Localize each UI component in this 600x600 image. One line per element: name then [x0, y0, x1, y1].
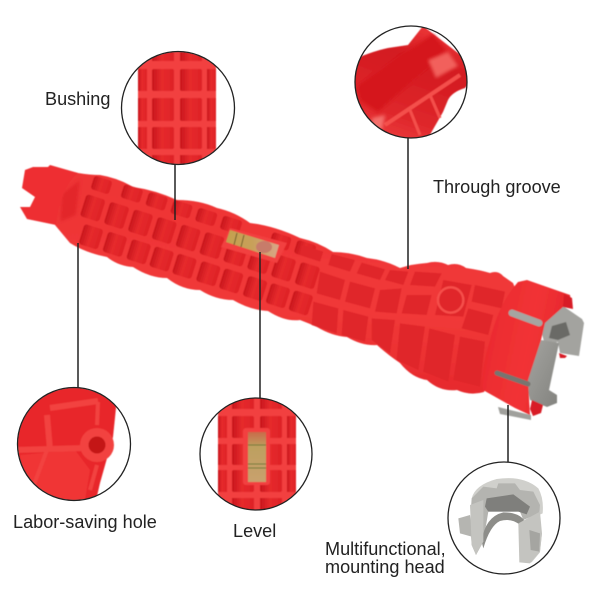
- callout: mounting head: [448, 462, 560, 574]
- label: multifunctional, mounting head: Multifunctional,: [325, 539, 446, 559]
- callout: level: [200, 395, 312, 513]
- mounting head red cap: [482, 280, 572, 415]
- callout: bushing: [122, 50, 234, 167]
- label: level: Level: [233, 521, 276, 541]
- mounting head gray insert: [498, 306, 584, 420]
- callout: labor-saving hole: [16, 386, 132, 502]
- leader lines: [78, 138, 508, 462]
- rib grid: narrow shaft cells: [72, 174, 329, 316]
- callout: through groove: [354, 25, 468, 139]
- left end cap: [20, 165, 78, 225]
- wrench tool: [20, 165, 584, 420]
- wrench body: [50, 166, 520, 394]
- head slots: [512, 313, 539, 323]
- shaft start recess: [60, 180, 80, 222]
- label: through groove: Through groove: [433, 177, 561, 197]
- rib grid: flared section cells: [300, 245, 505, 387]
- label: multifunctional, mounting head: mounting head: [325, 557, 445, 577]
- circle emboss: [438, 287, 463, 313]
- label: labor-saving hole: Labor-saving hole: [13, 512, 157, 532]
- level window: [221, 228, 287, 263]
- label: bushing: Bushing: [45, 89, 110, 109]
